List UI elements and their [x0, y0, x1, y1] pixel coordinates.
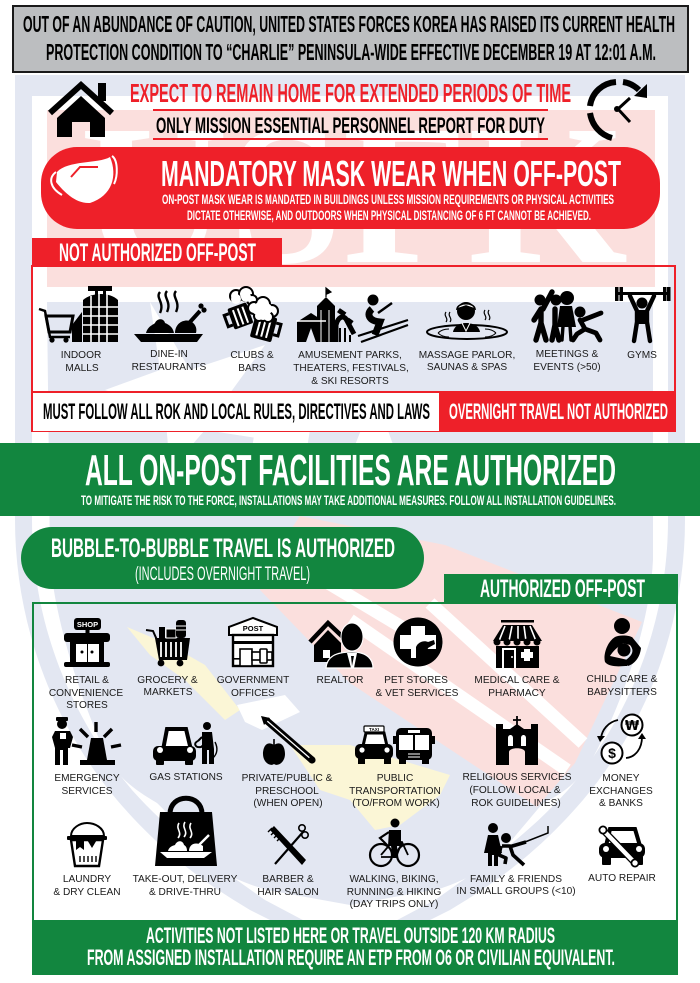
stay-home headline — [130, 78, 571, 140]
item: gyms — [615, 287, 670, 361]
item: walking, biking, running and hiking: WALKING, BIKING, — [349, 874, 439, 885]
item: medical care and pharmacy: MEDICAL CARE & — [474, 675, 560, 686]
item: take-out, delivery and drive-thru: TAKE-OUT, DELIVERY — [133, 874, 238, 885]
item: emergency services: SERVICES — [61, 786, 113, 797]
overnight travel callout — [439, 392, 675, 432]
item: retail and convenience stores: STORES — [66, 700, 108, 711]
item: money exchanges and banks: MONEY — [602, 773, 640, 784]
item: family and friends in small groups — [456, 823, 576, 897]
item: pet stores and vet services: PET STORES — [384, 675, 448, 686]
item: retail and convenience stores: SHOP — [77, 620, 98, 629]
item: massage parlor, saunas and spas: SAUNAS & SPAS — [427, 362, 507, 373]
item: gas stations: GAS STATIONS — [149, 772, 223, 783]
item: medical care and pharmacy — [474, 620, 560, 699]
icon: clock with arrow — [590, 82, 647, 138]
item: medical care and pharmacy: PHARMACY — [488, 688, 546, 699]
item: auto repair: AUTO REPAIR — [588, 873, 656, 884]
item: indoor malls: MALLS — [65, 363, 99, 374]
item: private, public and preschool — [242, 716, 333, 809]
item: public transportation — [349, 726, 441, 809]
item: gas stations — [149, 722, 223, 783]
item: walking, biking, running and hiking: RUNNING & HIKING — [347, 887, 441, 898]
item: child care and babysitters — [587, 618, 658, 698]
item: public transportation: TAXI — [369, 727, 379, 732]
item: emergency services — [52, 717, 121, 797]
item: emergency services: EMERGENCY — [54, 773, 120, 784]
item: grocery and markets: GROCERY & — [137, 675, 198, 686]
item: walking, biking, running and hiking — [347, 818, 441, 910]
item: retail and convenience stores — [49, 618, 123, 711]
item: private, public and preschool: PRIVATE/PUBLIC & — [242, 773, 333, 784]
item: public transportation: TRANSPORTATION — [349, 786, 441, 797]
item: government offices: GOVERNMENT — [217, 675, 289, 686]
item: amusement parks and ski resorts: AMUSEMENT PARKS, — [298, 350, 402, 361]
item: money exchanges and banks: & BANKS — [599, 798, 643, 809]
background: faded shield emblem: USFK — [80, 85, 628, 306]
item: retail and convenience stores: CONVENIENCE — [49, 688, 123, 699]
item: dine-in restaurants — [132, 291, 207, 373]
item: indoor malls: INDOOR — [61, 350, 101, 361]
item: indoor malls — [39, 286, 118, 374]
item: government offices: OFFICES — [231, 688, 275, 699]
item: laundry and dry clean — [53, 823, 121, 898]
ETP requirement band — [32, 920, 678, 975]
item: grocery and markets: MARKETS — [144, 687, 193, 698]
item: laundry and dry clean: LAUNDRY — [63, 874, 111, 885]
item: meetings and events: MEETINGS & — [536, 349, 598, 360]
item: clubs and bars: BARS — [238, 363, 266, 374]
item: meetings and events: EVENTS (>50) — [533, 362, 601, 373]
item: government offices — [217, 618, 289, 699]
item: retail and convenience stores: RETAIL & — [65, 675, 109, 686]
item: dine-in restaurants: DINE-IN — [150, 349, 188, 360]
item: child care and babysitters: BABYSITTERS — [587, 687, 657, 698]
item: child care and babysitters: CHILD CARE & — [587, 674, 658, 685]
item: money exchanges and banks: $ — [608, 745, 616, 761]
item: massage parlor, saunas and spas: MASSAGE PARLOR, — [419, 350, 515, 361]
item: realtor: REALTOR — [317, 675, 363, 686]
item: government offices: POST — [243, 624, 264, 633]
icon: face mask — [51, 156, 117, 203]
item: religious services — [463, 716, 572, 809]
item: amusement parks and ski resorts — [293, 288, 409, 387]
icon: house — [50, 83, 112, 137]
item: private, public and preschool: (WHEN OPEN) — [253, 798, 323, 809]
item: religious services: ROK GUIDELINES) — [471, 798, 561, 809]
bubble-to-bubble pill — [21, 527, 424, 589]
item: massage parlor, saunas and spas — [419, 302, 515, 373]
item: religious services: (FOLLOW LOCAL & — [469, 785, 561, 796]
item: public transportation: (TO/FROM WORK) — [352, 798, 440, 809]
bubble-to-bubble pill: (INCLUDES OVERNIGHT TRAVEL) — [135, 564, 310, 585]
on-post facilities band — [0, 443, 700, 516]
header banner — [13, 6, 688, 72]
item: clubs and bars: CLUBS & — [230, 350, 274, 361]
item: family and friends in small groups: IN SMALL GROUPS (<10) — [456, 886, 576, 897]
rules bar — [32, 391, 675, 431]
item: money exchanges and banks: ₩ — [625, 719, 640, 734]
item: money exchanges and banks — [589, 714, 653, 809]
item: pet stores and vet services — [376, 618, 459, 699]
panel: not authorized off-post — [32, 238, 675, 432]
panel: mandatory mask banner — [41, 147, 660, 229]
item: barber and hair salon: HAIR SALON — [257, 887, 319, 898]
panel: authorized off-post — [32, 574, 678, 975]
item: take-out, delivery and drive-thru: & DRIVE-THRU — [149, 887, 221, 898]
item: amusement parks and ski resorts: & SKI RESORTS — [311, 376, 389, 387]
item: religious services: RELIGIOUS SERVICES — [463, 772, 572, 783]
item: realtor — [310, 623, 373, 686]
item: family and friends in small groups: FAMILY & FRIENDS — [470, 874, 562, 885]
item: walking, biking, running and hiking: (DAY TRIPS ONLY) — [350, 899, 438, 910]
item: public transportation: PUBLIC — [377, 773, 413, 784]
item: take-out, delivery and drive-thru — [133, 798, 238, 898]
item: laundry and dry clean: & DRY CLEAN — [53, 887, 121, 898]
tab heading — [32, 238, 282, 267]
item: pet stores and vet services: & VET SERVICES — [376, 688, 459, 699]
item: money exchanges and banks: EXCHANGES — [589, 786, 653, 797]
item: meetings and events — [533, 291, 601, 373]
item: dine-in restaurants: RESTAURANTS — [132, 362, 207, 373]
item: grocery and markets — [137, 620, 198, 698]
item: amusement parks and ski resorts: THEATERS, FESTIVALS, — [293, 363, 409, 374]
item: auto repair — [588, 826, 656, 884]
item: clubs and bars — [222, 287, 282, 374]
item: gyms: GYMS — [627, 350, 657, 361]
item: private, public and preschool: PRESCHOOL — [255, 786, 319, 797]
bubble-to-bubble pill: BUBBLE-TO-BUBBLE TRAVEL IS AUTHORIZED — [51, 533, 395, 563]
item: barber and hair salon: BARBER & — [262, 874, 314, 885]
tab heading: NOT AUTHORIZED OFF-POST — [59, 239, 256, 267]
item: barber and hair salon — [257, 825, 319, 898]
